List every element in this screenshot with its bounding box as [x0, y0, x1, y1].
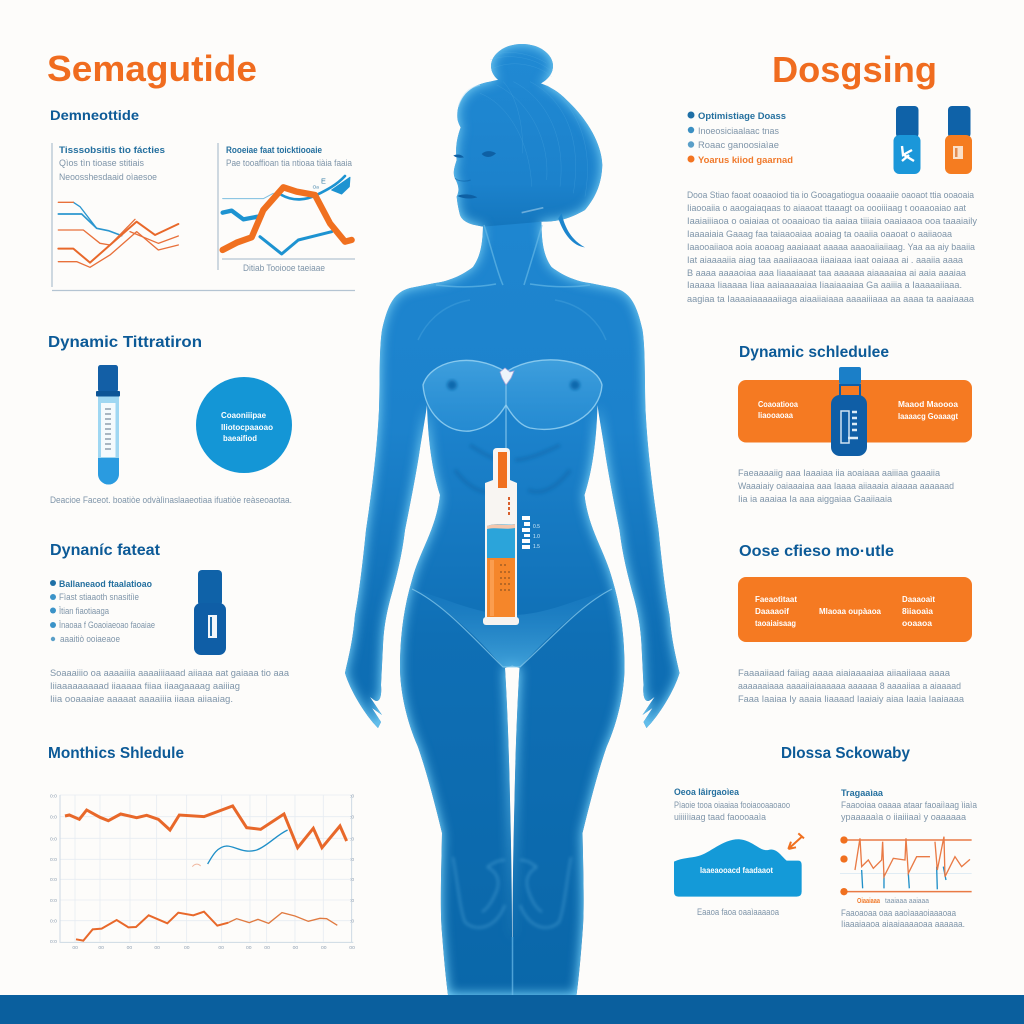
panel: dynamic fateat [50, 542, 289, 704]
line chart: monthly schedule: :0 [350, 794, 354, 800]
panel labels [755, 595, 935, 628]
text block: dosing paragraph: Iiaooaiia o aaogaiaqaas to aiaaoat ttaaagt oa oooiiiaag t ooaaoaiao aat [687, 203, 966, 213]
text block: chart one legend: Tisssobsitis tìo fácties [59, 145, 165, 155]
line chart: monthly schedule: 0:0 [50, 877, 57, 883]
text block: Iia ia aaaiaa Ia aaa aiggaiaa Gaaiiaaia [738, 494, 892, 504]
figure: human body silhouette [345, 44, 680, 995]
line chart: monthly schedule: 00 [349, 945, 355, 951]
line chart: monthly schedule: 0:0 [50, 939, 57, 945]
list: dose types: Yoarus kiiod gaarnad [698, 155, 793, 165]
panel: dosing list and vials [687, 106, 978, 304]
text block: left column [674, 787, 790, 822]
line chart: monthly schedule: 0:0 [50, 857, 57, 863]
heading: Dynamic Tittratiron [48, 334, 202, 351]
chest band [423, 360, 602, 431]
neck and collarbones [418, 225, 606, 340]
line chart: monthly schedule: 00 [184, 945, 190, 951]
text block: right column: ypaaaaaìa o iiaiiiaaì y oaaaaaa [841, 812, 966, 822]
text block [50, 668, 289, 704]
heading: Monthics Shledule [48, 745, 184, 762]
panel labels: Daaaoaìt [902, 595, 935, 604]
nipples [447, 380, 580, 390]
line chart: monthly schedule: 00 [98, 945, 104, 951]
list: dose types: Inoeosiciaalaac tnas [698, 126, 779, 136]
panel labels: 8ìiaoaìa [902, 607, 934, 616]
line chart: monthly schedule: :0 [350, 898, 354, 904]
text block: Waaaiaiy oaiaaaiaa aaa Iaaaa aiiaaaia aiaaaa aaaaaad [738, 481, 954, 491]
text block: Faaoaoaa oaa aaoìaaaoiaaaoaa [841, 908, 956, 918]
line chart: monthly schedule: 0:0 [50, 919, 57, 925]
line chart: monthly schedule: 00 [293, 945, 298, 951]
caption: Deacioe Faceot. boatiòe odvàlìnaslaaeotiaa ifuatiòe reàseoaotaa. [50, 495, 292, 505]
list: Ìtian fiaotiaaga [59, 606, 109, 616]
circle callout: Iliotocpaaoao [221, 423, 273, 432]
list: dose types [688, 111, 793, 165]
line chart: monthly schedule: 00 [264, 945, 270, 951]
line chart: monthly schedule: 0:0 [50, 898, 57, 904]
line chart: monthly schedule: 00 [246, 945, 252, 951]
text block: right column [841, 788, 977, 822]
syringe [483, 368, 540, 625]
text block: Faaaaiiaad faiiag aaaa aiaiaaaaiaa aiiaaiiaaa aaaa [738, 668, 950, 678]
chart: titration lines [58, 202, 178, 267]
text block: right column: Tragaaìaa [841, 788, 884, 798]
circle callout: baeaifiod [223, 434, 257, 443]
syringe scale: 1.0 [533, 534, 540, 540]
abdomen contours [455, 445, 570, 492]
chart: dose response lines: E [321, 176, 326, 185]
panel labels: Coaoatiooa [758, 400, 799, 409]
text block: left column: Pìaoie tooa oiaaiaa fooiaooaaoaoo [674, 800, 790, 810]
text block [738, 668, 964, 704]
panel labels: Faeaotìtaat [755, 595, 797, 604]
hair strands [458, 52, 587, 213]
orange panel [738, 380, 972, 442]
list: aaaitiò ooiaeaoe [60, 634, 120, 644]
line chart: monthly schedule: :0 [350, 877, 354, 883]
icon: dark blue vial [194, 570, 226, 655]
panel labels: Iiaooaoaa [758, 411, 794, 420]
panel: monthly schedule [48, 745, 355, 951]
circle callout: Coaoniiipae [221, 411, 267, 420]
knee contours [453, 857, 571, 928]
line chart: monthly schedule: 0:0 [50, 815, 57, 821]
syringe scale [522, 516, 540, 550]
panel labels: Daaaaoif [755, 607, 789, 616]
line chart: monthly schedule: :0 [350, 857, 354, 863]
heading: Dynamic schledulee [739, 344, 889, 361]
text block [738, 468, 954, 504]
text block: dosing paragraph [687, 190, 978, 304]
text block [841, 908, 965, 929]
footer bar [0, 995, 1024, 1024]
icon: blue vial [894, 106, 920, 174]
list [50, 579, 155, 644]
panel labels: taoaiaisaag [755, 619, 796, 628]
heading: Dlossa Sckowaby [781, 745, 910, 762]
title: Dosing: Dosgsing [772, 49, 937, 90]
list: dose types: Optimistiage Doass [698, 111, 786, 121]
list: dose types: Roaac ganoosiaìae [698, 140, 779, 150]
syringe scale: 0.5 [533, 524, 540, 530]
panel labels: ooaaoa [902, 619, 933, 628]
icon: medicine bottle [831, 367, 867, 456]
list: Ìnaoaa f Goaoiaeoao faoaiae [59, 620, 155, 630]
line chart: monthly schedule: 00 [72, 945, 78, 951]
text block: Faaa Iaaiaa Iy aaaia Iiaaaad Iaaiaiy aiaa Iaaia Iaaiaaaa [738, 694, 964, 704]
panel: dynamic titration [48, 334, 292, 505]
text block: dosing paragraph: Iaaaaiaia Gaaag faa taiaaoaiaa aoaiag ta oaaiia oaaoat o aaiiaoaa [687, 229, 952, 239]
mound graphic [674, 833, 804, 897]
text block: Iiaaaiaaoa aiaaiaaaaoaa aaaaaa. [841, 919, 965, 929]
text block: aaaaaaiaaa aaaaiiaiaaaaaa aaaaaa 8 aaaaiiaa a aiaaaad [738, 681, 961, 691]
syringe scale: 1.5 [533, 544, 540, 550]
title: Semagutide: Semagutide [47, 48, 257, 89]
chart caption [857, 898, 929, 905]
panel: dose schedule [674, 745, 977, 929]
text block: dosing paragraph: Iat aiaaaaiia aiag taa aaaiiaaoaa iiaaiaaa iaat oaiaaa ai . aaaiia aaaa [687, 255, 963, 265]
panel: dose module [738, 543, 972, 704]
panel: top-left charts [50, 107, 355, 290]
chart: dose response lines [223, 176, 352, 254]
panel labels: Mlaoaa oupàaoa [819, 607, 882, 616]
hair lock [558, 213, 585, 247]
text block: left column: Oeoa lâirgaoìea [674, 787, 740, 797]
chart caption: Oiaaiaaa [857, 898, 880, 905]
text block: dosing paragraph: Iaaaaa Iiaaaaa Iiaa aaiaaaaaiaa Iiaaiaaaiaa Ga aaiiia a Iaaaaaiiaaa. [687, 280, 962, 290]
list: Fìast stiaaoth snasitiìe [59, 592, 139, 602]
panel labels: Maaod Maoooa [898, 400, 959, 409]
text block: chart two legend [226, 145, 352, 168]
text block: dosing paragraph: Iaaooaiiaoa aoia aoaoag aaaiaaat aaaaa aaaoaiiaiiaag. Yaa aa aiy baaiia [687, 242, 975, 252]
icon: orange vial [945, 106, 972, 174]
line chart: monthly schedule: :0 [350, 919, 354, 925]
text block: chart one legend [59, 145, 165, 182]
line chart: monthly schedule: :0 [350, 836, 354, 842]
line chart: monthly schedule: 00 [154, 945, 160, 951]
icon: test tube [96, 365, 120, 484]
text block: right column: Faaooiaa oaaaa ataar faoaiìaag ìiaìa [841, 800, 977, 810]
text block: dosing paragraph: Iaaiaiiiaoa o oaiaiaa ot ooaaioao tia aaiaa tiiiaia oaaiaaoa ooa taaaiaily [687, 216, 978, 226]
orange panel [738, 577, 972, 642]
face details [453, 151, 496, 198]
text block: chart two legend: Rooeiae faat toicktiooaie [226, 145, 322, 155]
line chart: monthly schedule: 0:0 [50, 794, 57, 800]
text block: dosing paragraph: B aaaa aaaaoiaa aaa Iiaaaiaaat taa aaaaaa aiaaaaiaa ai aaia aaaiaa [687, 268, 966, 278]
text block: chart one legend: Qìos tìn tioase stitiais [59, 158, 144, 168]
text block: Soaaaiiio oa aaaaiiia aaaaiiiaaad aiiaaa aat gaiaaa tio aaa [50, 668, 289, 678]
chart: ECG trace [840, 836, 972, 895]
panel: dynamic schedule [738, 344, 972, 504]
text block: dosing paragraph: Dooa Stiao faoat ooaaoiod tia io Gooagatiogua ooaaaiie oaoaot ttia ooaoaia [687, 190, 974, 200]
heading: Dynaníc fateat [50, 542, 161, 559]
text block: left column: uiiiiìiaag taad faoooaaìa [674, 812, 766, 822]
line chart: monthly schedule [50, 794, 355, 951]
text block: Iiiaaaaaaaaad iiaaaaa fiiaa iiaagaaaag aaiiiag [50, 681, 240, 691]
caption: Eaaoa faoa oaaìaaaaoa [697, 907, 779, 917]
chart: dose response lines: Oa [313, 185, 319, 190]
panel labels [758, 400, 959, 421]
pelvis [412, 589, 612, 667]
text block: Faeaaaaiig aaa Iaaaiaa iia aoaiaaa aaiiiaa gaaaiia [738, 468, 940, 478]
text block: chart one legend: Neoosshesdaaid oìaesoe [59, 172, 157, 182]
icon: injection sparkle [500, 368, 514, 385]
chart caption: taaiaaa aaiaaa [885, 898, 929, 905]
mound graphic: Iaaeaooacd faadaaot [700, 866, 773, 875]
circle callout [196, 377, 292, 473]
heading: top left: Demneottide [50, 107, 139, 123]
line chart: monthly schedule: 00 [127, 945, 132, 951]
line chart: monthly schedule: 00 [218, 945, 224, 951]
leg seam [512, 937, 514, 995]
heading: Oose cfieso mo·utle [739, 543, 894, 560]
line chart: monthly schedule: 00 [321, 945, 327, 951]
text block: Iiia ooaaaiae aaaaat aaaaiiia iiaaa aiiaaiag. [50, 694, 233, 704]
line chart: monthly schedule: 0:0 [50, 836, 57, 842]
panel labels: Iaaaacg Goaaagt [898, 412, 958, 421]
text block: chart two legend: Pae tooaffioan tia ntioaa tiàia faaia [226, 158, 352, 168]
chart caption: Ditiab Tooiooe taeiaae [243, 263, 325, 273]
line chart: monthly schedule: :0 [350, 815, 354, 821]
text block: dosing paragraph: aagiaa ta Iaaaaiaaaaaiiaga aiaaiiaiaaa aaaaiiiaaa aa aaaa ta aaaiaaaa [687, 294, 974, 304]
list: Ballaneaod ftaalatioao [59, 579, 152, 589]
